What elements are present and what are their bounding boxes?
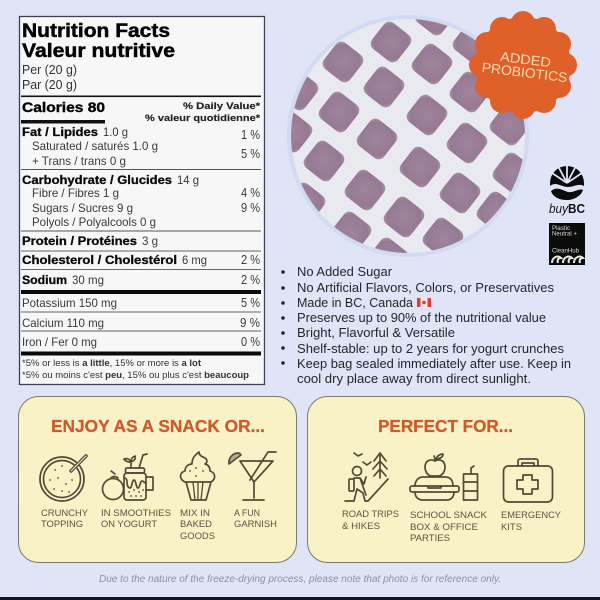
label: emergency kits: KITS <box>501 522 522 533</box>
icon: canadian flag <box>417 298 431 307</box>
badge: added probiotics: ADDED <box>499 49 552 70</box>
product photo circle <box>287 15 529 257</box>
label: crunchy topping: CRUNCHY <box>41 508 89 519</box>
panel: nutrition facts <box>20 16 264 384</box>
panel: perfect for <box>308 396 584 562</box>
nutrient rows: 9 % <box>241 201 260 215</box>
label: a fun garnish <box>234 508 277 530</box>
nutrient rows: Fat / Lipides <box>22 125 98 139</box>
nutrient rows: 9 % <box>240 316 260 330</box>
label: school snack box and office parties: SCHOOL SNACK <box>410 510 488 521</box>
nutrient rows: 5 % <box>241 296 260 310</box>
nutrient rows: 14 g <box>177 173 199 187</box>
feature bullet list: Keep bag sealed immediately after use. Keep in <box>297 356 571 371</box>
label: crunchy topping: TOPPING <box>41 519 83 530</box>
nutrient rows: 1.0 g <box>103 125 128 139</box>
nutrient rows: 0 % <box>241 335 260 349</box>
label: road trips and hikes: & HIKES <box>342 521 380 532</box>
label: a fun garnish: GARNISH <box>234 519 277 530</box>
calories row: Calories 80 <box>22 100 105 115</box>
label: in smoothies on yogurt <box>101 508 171 530</box>
label: crunchy topping <box>41 508 89 530</box>
badge: added probiotics: PROBIOTICS <box>481 60 568 85</box>
nutrient rows: + Trans / trans 0 g <box>32 154 126 168</box>
nutrient rows: Potassium 150 mg <box>22 296 117 310</box>
icon: first aid kit <box>504 459 552 502</box>
panel: enjoy as a snack <box>18 396 296 562</box>
footnote: *5% or less is a little, 15% or more is a lot <box>22 358 202 369</box>
label: emergency kits: EMERGENCY <box>501 510 562 521</box>
icon: cupcake <box>180 452 215 500</box>
icon: snack box, apple and cup <box>410 454 478 500</box>
nutrient rows: 5 % <box>241 147 260 161</box>
feature bullet list: No Added Sugar <box>297 264 393 279</box>
nutrient rows: 4 % <box>241 186 260 200</box>
heading: nutrition facts <box>22 21 175 62</box>
label: in smoothies on yogurt: ON YOGURT <box>101 519 157 530</box>
feature bullet list: cool dry place away from direct sunlight. <box>297 371 531 386</box>
label: road trips and hikes <box>342 509 399 532</box>
nutrient rows: 3 g <box>142 234 158 248</box>
logo: buyBC <box>549 165 585 216</box>
nutrient rows: Saturated / saturés 1.0 g <box>32 139 158 153</box>
footer disclaimer: Due to the nature of the freeze-drying process, please note that photo is for reference only. <box>99 574 501 585</box>
badge: added probiotics <box>469 11 577 119</box>
label: school snack box and office parties: PARTIES <box>410 533 450 544</box>
logo: plastic neutral cleanhub: Neutral + <box>552 232 578 238</box>
heading: nutrition facts: Valeur nutritive <box>22 41 175 62</box>
nutrient rows: Cholesterol / Cholestérol <box>22 253 177 267</box>
nutrient rows: Protein / Protéines <box>22 234 137 248</box>
nutrient rows: 6 mg <box>182 253 207 267</box>
icon: crunchy topping bowl <box>40 456 86 501</box>
heading: perfect for: PERFECT FOR... <box>378 416 513 436</box>
nutrient rows: 1 % <box>241 128 260 142</box>
label: emergency kits <box>501 510 562 533</box>
logo: plastic neutral cleanhub: Plastic <box>552 226 570 232</box>
label: mix in baked goods <box>180 508 215 542</box>
label: mix in baked goods: MIX IN <box>180 508 210 519</box>
nutrient rows: Sugars / Sucres 9 g <box>32 201 133 215</box>
nutrient rows: 2 % <box>241 273 260 287</box>
nutrient rows: 30 mg <box>72 273 104 287</box>
serving size: Per (20 g) <box>22 63 77 77</box>
nutrient rows: Iron / Fer 0 mg <box>22 335 97 349</box>
serving size <box>22 63 77 92</box>
calories row: % Daily Value* <box>183 101 261 111</box>
logo: plastic neutral cleanhub <box>549 223 585 265</box>
nutrient rows: 2 % <box>241 253 260 267</box>
icon: smoothie jar and orange <box>102 454 153 500</box>
footnote <box>22 358 249 381</box>
feature bullet list: Shelf-stable: up to 2 years for yogurt crunches <box>297 341 564 356</box>
nutrient rows <box>21 125 261 356</box>
nutrient rows: Carbohydrate / Glucides <box>22 173 172 187</box>
heading: enjoy as a snack: ENJOY AS A SNACK OR... <box>51 416 265 436</box>
nutrient rows: Polyols / Polyalcools 0 g <box>32 215 156 229</box>
logo: plastic neutral cleanhub: CleanHub <box>552 248 580 254</box>
nutrient rows: Calcium 110 mg <box>22 316 104 330</box>
heading: nutrition facts: Nutrition Facts <box>22 21 170 42</box>
label: school snack box and office parties: BOX & OFFICE <box>410 522 478 533</box>
label: in smoothies on yogurt: IN SMOOTHIES <box>101 508 171 519</box>
serving size: Par (20 g) <box>22 78 77 92</box>
feature bullet list: Bright, Flavorful & Versatile <box>297 325 455 340</box>
icon: martini garnish <box>229 452 276 500</box>
feature bullet list: Preserves up to 90% of the nutritional value <box>297 310 546 325</box>
icon: hiker and trees <box>345 453 388 501</box>
feature bullet list: No Artificial Flavors, Colors, or Preservatives <box>297 280 554 295</box>
feature bullet list: Made in BC, Canada <box>297 295 414 310</box>
nutrient rows: Fibre / Fibres 1 g <box>32 186 119 200</box>
calories row: % valeur quotidienne* <box>145 113 261 123</box>
nutrient rows: Sodium <box>22 273 67 287</box>
label: a fun garnish: A FUN <box>234 508 260 519</box>
feature bullet list <box>281 264 571 386</box>
label: mix in baked goods: BAKED <box>180 519 212 530</box>
label: road trips and hikes: ROAD TRIPS <box>342 509 399 520</box>
logo: buyBC: buyBC <box>549 202 585 216</box>
footnote: *5% ou moins c'est peu, 15% ou plus c'est beaucoup <box>22 370 249 381</box>
calories row <box>21 100 261 124</box>
label: mix in baked goods: GOODS <box>180 531 215 542</box>
label: school snack box and office parties <box>410 510 488 544</box>
